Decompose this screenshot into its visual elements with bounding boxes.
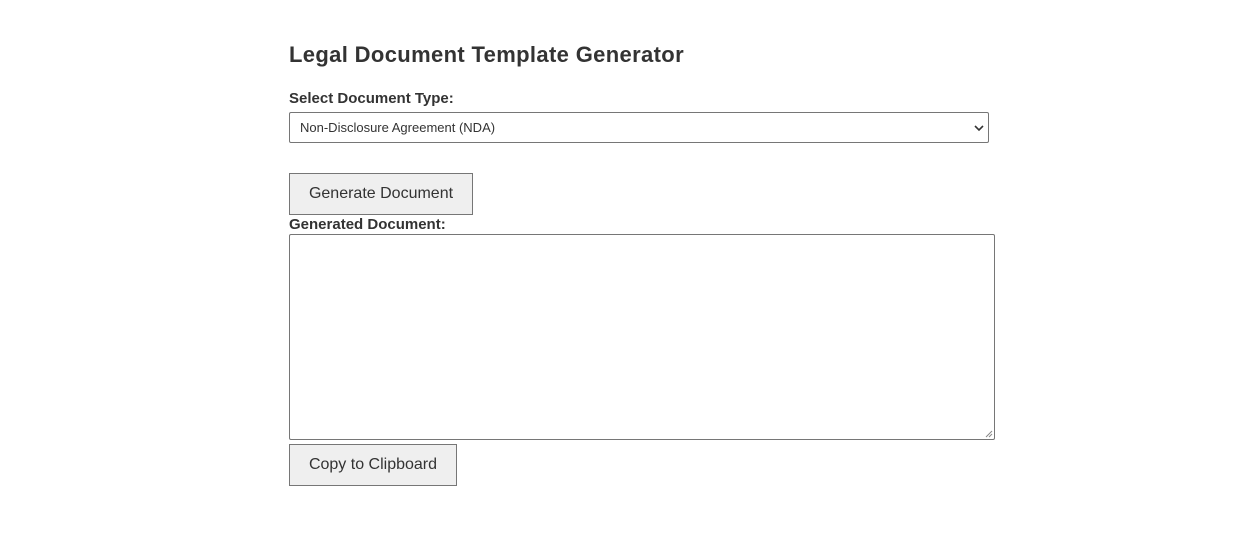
dropdown: Non-Disclosure Agreement (NDA)	[300, 120, 495, 135]
textarea	[289, 234, 995, 440]
button: copy to clipboard	[289, 444, 457, 486]
title: Legal Document Template Generator	[289, 42, 684, 67]
button: generate document	[289, 173, 473, 215]
label: generated document: Generated Document:	[289, 216, 446, 233]
label: select document type: Select Document Type:	[289, 90, 454, 107]
button: generate document: Generate Document	[309, 185, 453, 202]
button: copy to clipboard: Copy to Clipboard	[309, 456, 437, 473]
dropdown	[289, 112, 989, 143]
